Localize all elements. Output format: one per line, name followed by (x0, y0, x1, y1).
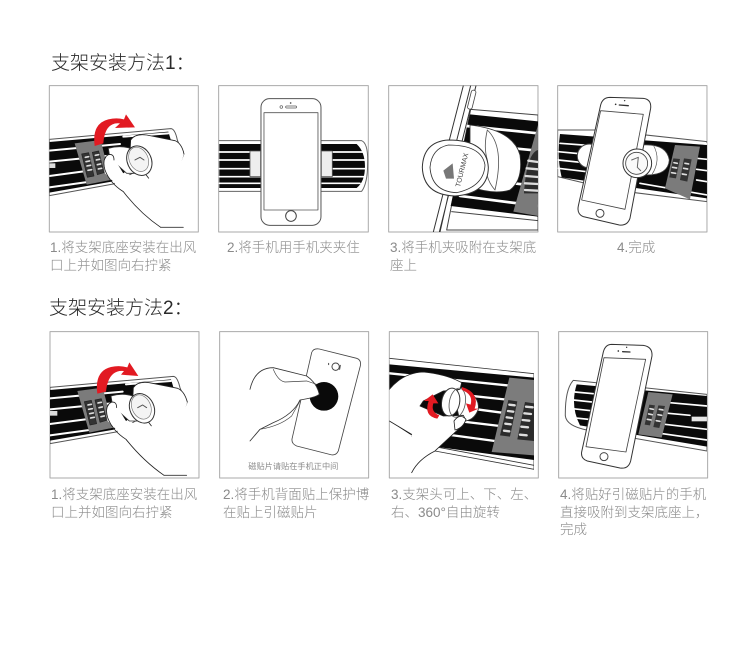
icon: red rotate arrow (94, 114, 135, 146)
caption: method 1 step 1 (50, 240, 196, 273)
panel: method 1 step 4 (558, 86, 707, 232)
caption: method 1 step 3: 座上 (390, 258, 417, 273)
panel: method 2 step 3 (389, 332, 538, 478)
caption: method 2 step 2: 2.将手机背面贴上保护博 (223, 487, 369, 502)
title: method 2: 支架安装方法2： (49, 298, 193, 319)
caption: method 2 step 4: 完成 (560, 522, 587, 537)
icon: red rotate arrows (424, 387, 479, 419)
caption: method 2 step 4: 4.将贴好引磁贴片的手机 (560, 487, 706, 502)
panel: method 2 step 4 (559, 332, 708, 478)
note text: 磁贴片请贴在手机正中间 (248, 461, 338, 471)
icon: red rotate arrow (97, 362, 138, 394)
caption: method 2 step 1: 1.将支架底座安装在出风 (51, 487, 197, 502)
caption: method 1 step 1: 口上并如图向右拧紧 (50, 258, 172, 273)
caption: method 2 step 3: 3.支架头可上、下、左、 (391, 487, 537, 502)
panel: method 2 step 2 (220, 332, 369, 478)
caption: method 2 step 2: 在贴上引磁贴片 (223, 505, 318, 520)
caption: method 2 step 1 (51, 487, 197, 520)
caption: method 1 step 1: 1.将支架底座安装在出风 (50, 240, 196, 255)
caption: method 1 step 3: 3.将手机夹吸附在支架底 (390, 240, 536, 255)
caption: method 2 step 1: 口上并如图向右拧紧 (51, 505, 172, 520)
panel: method 2 step 1 (50, 332, 199, 478)
caption: method 1 step 4: 4.完成 (617, 240, 655, 255)
hand (250, 368, 319, 441)
illustrations (48, 85, 708, 478)
logo text: TOURMAX (455, 152, 470, 188)
panel: method 1 step 3 (389, 86, 538, 232)
caption: method 1 step 2: 2.将手机用手机夹夹住 (227, 240, 360, 255)
panel: method 1 step 2 (219, 86, 368, 232)
title: method 1: 支架安装方法1： (51, 53, 195, 74)
caption: method 2 step 4: 直接吸附到支架底座上， (560, 505, 708, 520)
caption: method 2 step 4 (560, 487, 708, 537)
caption: method 1 step 3 (390, 240, 536, 273)
caption: method 2 step 3: 右、360°自由旋转 (391, 505, 500, 520)
caption: method 2 step 3 (391, 487, 537, 520)
panel: method 1 step 1 (49, 86, 198, 232)
caption: method 2 step 2 (223, 487, 369, 520)
